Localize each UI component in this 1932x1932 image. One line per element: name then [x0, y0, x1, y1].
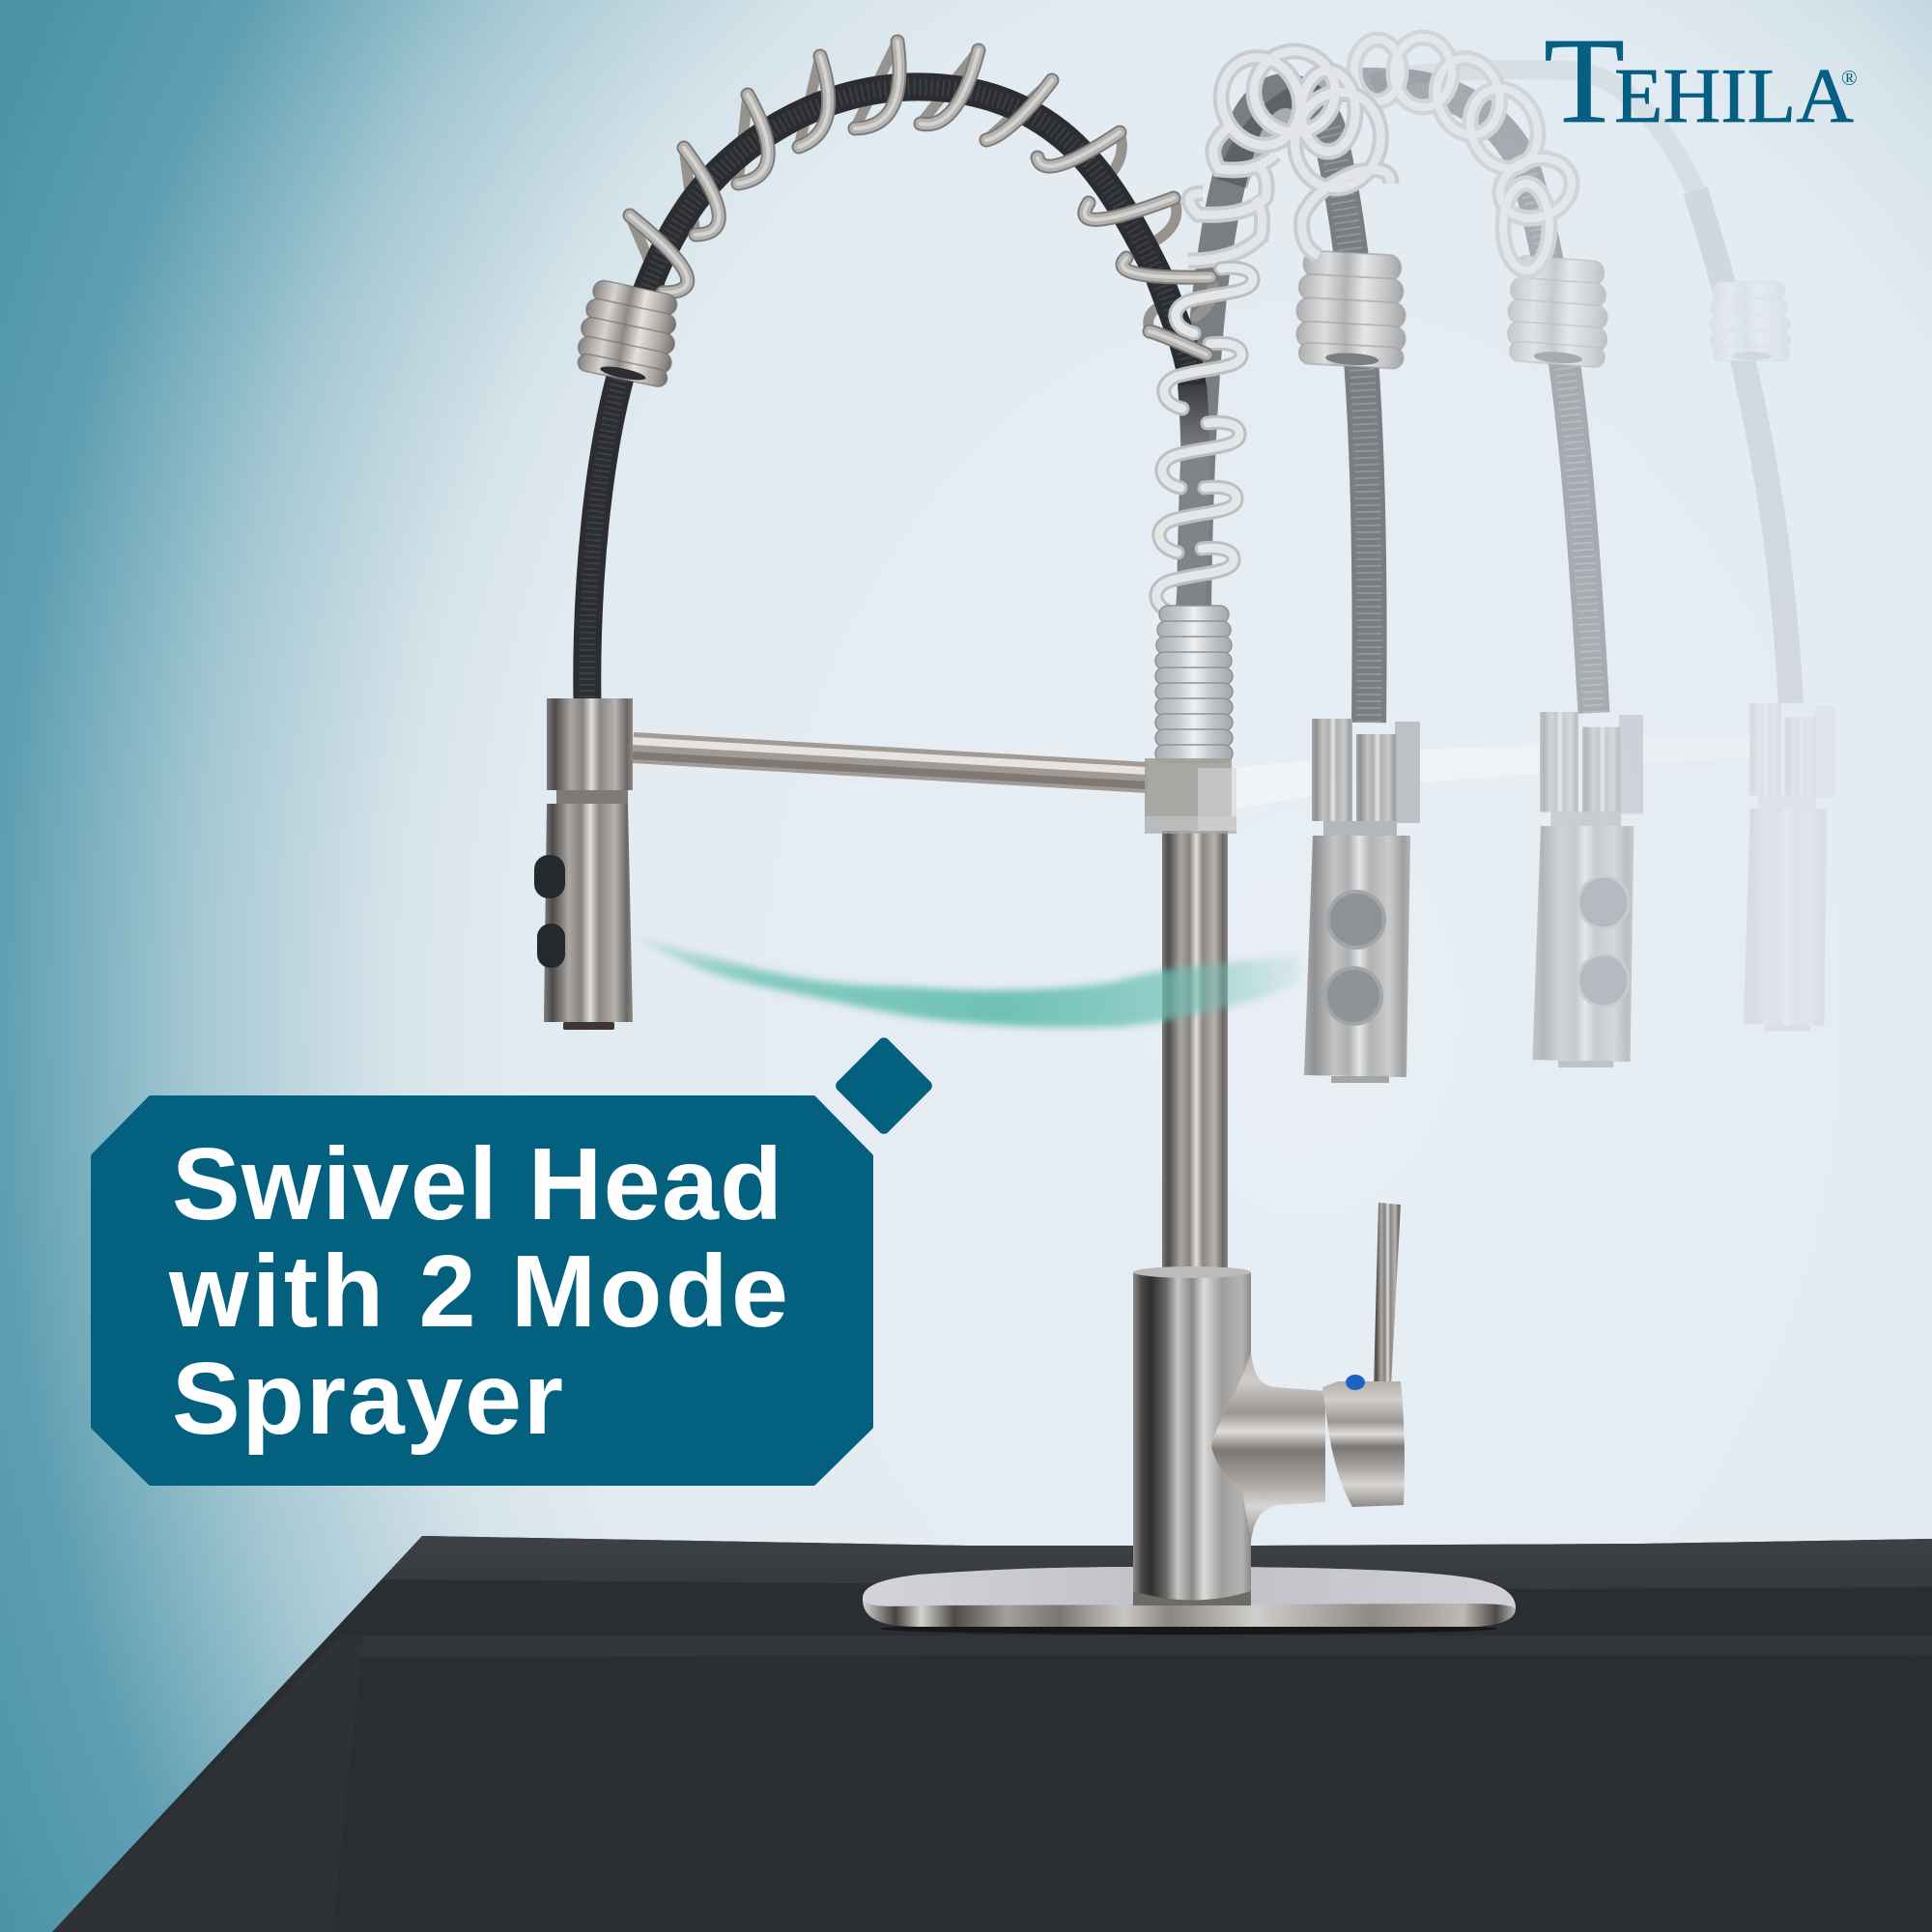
ghost 1 hose [1194, 91, 1370, 723]
body reflection on plate [1133, 1584, 1251, 1605]
teal swoosh motion trail [633, 935, 1299, 1028]
ghost arm bar 2 [1420, 745, 1540, 782]
label panel [94, 1098, 870, 1483]
front coil strands [630, 42, 1210, 355]
ghost 2 buttons [1578, 876, 1629, 1007]
lever handle [1374, 1203, 1401, 1386]
main faucet [534, 42, 1516, 1634]
ghost 1 spray button upper [1328, 892, 1384, 948]
logo: Tehila: T [1544, 14, 1625, 149]
deck plate edge [863, 1567, 1516, 1627]
horizontal support bar [633, 741, 1148, 785]
pull-down head [544, 804, 633, 1022]
ghost 3 coil bundle [1710, 282, 1791, 361]
ghost 1 coil loops [1188, 40, 1391, 261]
stem [1162, 831, 1228, 1277]
logo: Tehila: ® [1841, 66, 1858, 90]
arm ghost bar 1 [1232, 760, 1312, 810]
ghost 1 spray button lower [1325, 968, 1381, 1024]
ghost 1 braid [1328, 128, 1370, 723]
lower spring [1155, 606, 1233, 762]
ghost 3 head [1744, 703, 1834, 1031]
blue indicator dot [1346, 1375, 1365, 1390]
ghost 2 head [1532, 712, 1643, 1067]
back coil strands [630, 42, 1212, 331]
logo: Tehila [1544, 14, 1858, 149]
ghost 3 upper arc [1372, 70, 1695, 190]
diamond accent [834, 1036, 934, 1136]
lower translucent coils [1156, 268, 1253, 613]
pull-down head collar [547, 698, 633, 790]
plate shadow [879, 1623, 1497, 1634]
ghost 2 coil bundle [1505, 255, 1612, 368]
faucet body [1133, 1272, 1251, 1600]
handle cylinder [1322, 1381, 1405, 1507]
logo: Tehila: EHILA [1614, 54, 1854, 139]
ghost arm bar 3 [1643, 736, 1749, 763]
label text: Sprayer [172, 1342, 563, 1456]
head neck [556, 790, 628, 805]
hose braid [587, 87, 1192, 703]
handle connector [1211, 1352, 1325, 1541]
deck plate top [863, 1567, 1516, 1608]
coil bundle [573, 278, 685, 388]
label text: Swivel Head [172, 1127, 782, 1241]
body top rim [1133, 1266, 1251, 1278]
ghost 3 hose [1695, 190, 1791, 703]
ghost 2 braid [1523, 164, 1594, 713]
ghost 2 coil loops [1354, 38, 1580, 270]
ghost 2 hose [1232, 83, 1594, 713]
ghost faucet 3 (faintest) [1372, 70, 1834, 1031]
ghost 1 head [1304, 719, 1420, 1083]
label text [168, 1127, 788, 1456]
sink [52, 1536, 1932, 1932]
button upper [534, 855, 565, 898]
label text: with 2 Mode [168, 1235, 788, 1349]
hose lower fade [1190, 384, 1196, 609]
joint [1145, 758, 1236, 834]
nozzle [563, 1022, 614, 1030]
ghost 1 coil bundle [1294, 250, 1409, 369]
button lower [537, 923, 565, 968]
ghost faucet 2 [1232, 83, 1643, 1067]
ghost faucet 1 [1194, 91, 1420, 1083]
hose [587, 87, 1192, 703]
callout: feature label [94, 1036, 934, 1483]
